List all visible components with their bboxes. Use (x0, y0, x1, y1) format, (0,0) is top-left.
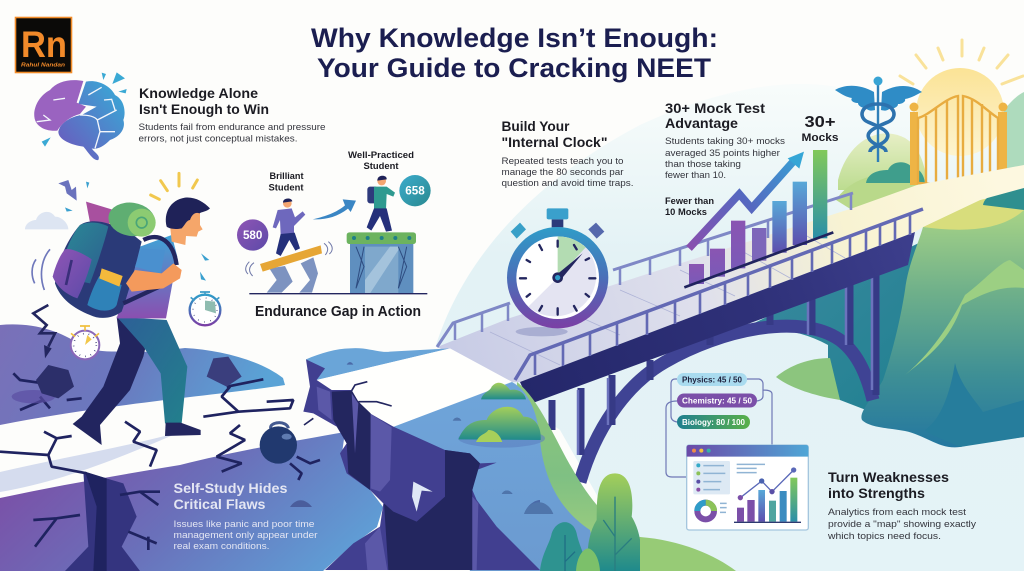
sun rays (900, 40, 1023, 84)
blue lobes (58, 81, 125, 160)
text: knowledge alone (138, 86, 326, 144)
pill: physics: Physics: 45 / 50 (682, 376, 743, 384)
tick dots (193, 298, 217, 322)
main chasm (65, 472, 140, 571)
bottom right green corner (640, 537, 736, 571)
text: mock test advantage: than those taking (665, 158, 741, 169)
backpack teal panel (58, 222, 108, 283)
torso (117, 235, 177, 318)
wedge (205, 301, 216, 313)
lightning left (33, 305, 55, 358)
shadow (516, 327, 568, 336)
blue rim (306, 348, 450, 380)
text: knowledge alone: Knowledge Alone (139, 86, 259, 101)
light green hill (838, 133, 928, 190)
hair (166, 198, 210, 229)
dashboard connectors (666, 379, 772, 477)
badge 658: 658 (405, 185, 425, 198)
label: brilliant student: Student (268, 183, 304, 193)
axis (684, 232, 833, 287)
title: Your Guide to Cracking NEET (317, 53, 712, 83)
text: internal clock: Repeated tests teach you to (502, 155, 624, 166)
text: knowledge alone: Students fail from endurance and pressure (138, 121, 326, 132)
boulder left (36, 365, 74, 398)
text: turn weaknesses: which topics need focus. (827, 530, 941, 541)
tower (350, 244, 413, 293)
path shadow band (0, 432, 180, 492)
rocks (267, 257, 318, 293)
lighter facets (317, 387, 478, 570)
label: 30+ mocks (802, 114, 838, 144)
middle cliff and chasm (303, 348, 540, 570)
label: fewer than 10 mocks: Fewer than (665, 196, 714, 206)
sidebar (693, 461, 730, 494)
sunrise and gate scene (835, 40, 1024, 215)
text: internal clock (502, 119, 634, 188)
crown (71, 326, 99, 337)
forearm and hand (126, 263, 182, 292)
hands (85, 335, 92, 345)
curved arrow (313, 199, 356, 219)
chasm wall (303, 359, 540, 570)
stopwatch low (71, 326, 99, 359)
label: 30+ mocks: 30+ (804, 114, 836, 131)
yellow band under road (923, 190, 1024, 230)
boulder right (207, 357, 242, 387)
head and neck (170, 212, 203, 245)
small tree branch (565, 535, 575, 571)
small rocks (347, 362, 540, 514)
golden gate (910, 96, 1008, 192)
dark ravine (925, 363, 1024, 447)
label: well-practiced student: Well-Practiced (348, 150, 414, 160)
dashboard bars (734, 478, 801, 522)
white plateau (317, 348, 512, 427)
tower braces (356, 247, 407, 288)
bedroll spiral (136, 217, 147, 228)
small bush (476, 430, 502, 442)
label: fewer than 10 mocks: 10 Mocks (665, 207, 707, 217)
ticks (520, 241, 595, 315)
front green hill (836, 172, 930, 215)
shoulder strap (123, 237, 177, 303)
hub (552, 272, 563, 283)
yellow book (99, 268, 123, 287)
post finials (910, 102, 918, 112)
tall tree (587, 473, 641, 571)
fascia (520, 232, 915, 404)
hand (555, 253, 583, 281)
text: knowledge alone: errors, not just conceptual mistakes. (138, 132, 298, 144)
text: knowledge alone: Isn't Enough to Win (139, 102, 269, 117)
green hillside near bridge (517, 382, 735, 571)
crown (552, 219, 563, 227)
green bedroll (106, 200, 157, 239)
top ball (874, 76, 882, 86)
label: brilliant student (268, 171, 304, 193)
kettlebell (260, 423, 297, 464)
pill: chemistry (677, 394, 757, 408)
window (687, 445, 808, 530)
pale sky region (436, 84, 1024, 571)
logo letters: Rn (21, 24, 67, 65)
yellow pages (108, 209, 122, 231)
dark crevice lower (384, 450, 480, 570)
wobble lines (246, 242, 332, 276)
brilliant student figure (273, 198, 305, 256)
cracks (0, 373, 320, 550)
small sparks (65, 182, 209, 281)
stopwatch high (190, 292, 220, 325)
tick dots (74, 334, 96, 356)
small green hill behind arch (776, 358, 840, 400)
text: self-study: Self-Study Hides (174, 481, 288, 496)
snakes (862, 104, 894, 152)
staff (877, 84, 879, 162)
small mound (290, 500, 312, 507)
cracks and rocks on left ground (0, 173, 320, 571)
ground line (249, 292, 427, 296)
lower ground (0, 432, 383, 571)
text: turn weaknesses: provide a "map" showing exactly (828, 518, 976, 529)
sleeve (135, 248, 165, 274)
dark crevice upper (332, 391, 371, 490)
deck plank lines (490, 232, 845, 365)
deck (437, 165, 1024, 382)
text: internal clock: question and avoid time traps. (502, 177, 634, 188)
right cliff hill (861, 179, 1024, 447)
bridge columns (552, 270, 876, 455)
white gap (412, 482, 433, 512)
left back hill (0, 324, 285, 425)
tree branches (603, 497, 632, 571)
text: self-study: management only appear under (174, 529, 318, 540)
platform studs (352, 236, 411, 240)
text: mock test advantage (665, 101, 785, 180)
text: self-study: real exam conditions. (174, 540, 270, 551)
line chart (738, 467, 796, 500)
title: Why Knowledge Isn’t Enough: (311, 23, 718, 53)
text: mock test advantage: 30+ Mock Test (665, 101, 766, 116)
bushes on cliff (453, 383, 641, 571)
man walking (53, 198, 210, 445)
caption: endurance gap: Endurance Gap in Action (255, 304, 421, 320)
sidebar items (696, 463, 765, 512)
logo (16, 18, 72, 72)
text: mock test advantage: fewer than 10. (665, 169, 726, 180)
header bar (687, 445, 808, 457)
title (311, 23, 718, 83)
plain shadow (458, 429, 545, 448)
crown (191, 292, 219, 301)
donut chart (697, 503, 714, 519)
lightning top (58, 180, 77, 201)
back leg (73, 317, 148, 445)
text: mock test advantage: Advantage (665, 116, 739, 131)
text: mock test advantage: Students taking 30+ mocks (665, 135, 785, 146)
text: self-study (174, 481, 318, 551)
near railing (515, 209, 923, 380)
cloud (25, 212, 68, 229)
label: well-practiced student: Student (364, 161, 398, 171)
sparks (42, 72, 127, 147)
wings (835, 86, 875, 111)
foreground shrub (576, 548, 600, 571)
arrow head (788, 152, 804, 169)
chart: mock test bars (684, 150, 833, 287)
pill: biology (677, 415, 750, 429)
icon: brain (34, 72, 127, 160)
arch (580, 326, 873, 482)
face (516, 236, 599, 319)
logo name: Rahul Nandan (21, 62, 66, 68)
highlight (282, 434, 292, 440)
purple lobe (34, 80, 86, 131)
back right hill (1000, 92, 1024, 172)
rocks (453, 418, 553, 514)
blue ground middle (393, 382, 600, 571)
front leg (117, 317, 187, 423)
backpack body (55, 221, 142, 318)
icon: stopwatch (507, 208, 608, 336)
text: turn weaknesses: Analytics from each mock test (828, 506, 966, 517)
crack spurs (304, 382, 392, 425)
text: internal clock: Build Your (502, 119, 570, 134)
label: well-practiced student (348, 150, 414, 171)
far railing (437, 193, 853, 347)
pill: chemistry: Chemistry: 45 / 50 (682, 396, 753, 406)
text: self-study: Issues like panic and poor time (174, 518, 314, 529)
case (507, 227, 608, 328)
light ridge (905, 260, 1024, 375)
tower diagonal highlight (365, 247, 398, 293)
side buttons (511, 223, 526, 239)
bars (689, 150, 827, 284)
sun (916, 68, 1004, 156)
yellow rays (151, 173, 197, 199)
bush at road edge (983, 179, 1024, 210)
analytics dashboard (687, 445, 808, 530)
left and right leaves (918, 96, 998, 192)
upper bush (481, 383, 526, 399)
light column edges (578, 270, 872, 455)
label: brilliant student: Brilliant (270, 171, 304, 181)
motion lines (32, 249, 50, 290)
text: internal clock: manage the 80 seconds par (502, 166, 624, 177)
text: turn weaknesses: Turn Weaknesses (828, 470, 949, 485)
label: 30+ mocks: Mocks (802, 132, 838, 144)
brain cracks (37, 87, 117, 148)
text: internal clock: "Internal Clock" (502, 135, 608, 150)
green wedge (558, 236, 586, 278)
endurance gap illustration (237, 150, 431, 320)
purple pocket (53, 249, 92, 298)
text: self-study: Critical Flaws (174, 497, 266, 512)
lavender shade (528, 245, 596, 316)
lower bush (458, 407, 541, 440)
badge 580: 580 (243, 229, 262, 242)
bush behind road (866, 162, 925, 183)
green platform (347, 232, 416, 244)
trend arrow (689, 161, 794, 248)
blue pocket (87, 276, 122, 311)
text: turn weaknesses (827, 470, 976, 541)
small tree (540, 522, 588, 571)
text: turn weaknesses: into Strengths (828, 486, 925, 501)
gate posts (910, 112, 1007, 190)
book on top (86, 202, 112, 230)
label: fewer than 10 mocks (665, 196, 714, 217)
badge 580 (237, 219, 268, 251)
bridge (437, 165, 1024, 482)
text: mock test advantage: averaged 35 points higher (665, 147, 780, 158)
pocket flap strap (66, 260, 72, 285)
caduceus icon (835, 76, 922, 162)
tower light panel (365, 247, 398, 293)
badge 658 (399, 175, 431, 206)
front shoe (165, 423, 201, 436)
pill: physics (677, 373, 747, 386)
shadow of boulder (12, 390, 55, 403)
pill: biology: Biology: 80 / 100 (682, 418, 746, 427)
window dots (692, 449, 696, 453)
practiced student figure (367, 176, 395, 232)
teal hillside under bridge (740, 240, 925, 425)
chasm dark core (85, 472, 107, 571)
bedroll end (128, 209, 156, 237)
wobbling plank (260, 245, 322, 272)
